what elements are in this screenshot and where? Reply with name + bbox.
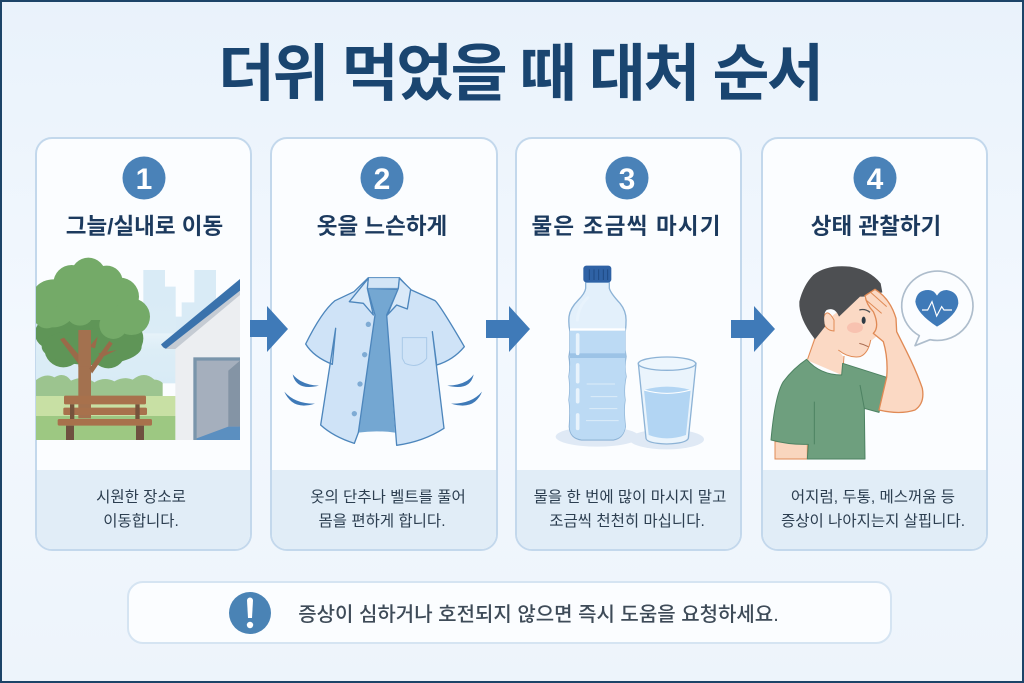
step 1 heading: 그늘/실내로 이동 — [66, 214, 223, 239]
step 2 heading: 옷을 느슨하게 — [317, 214, 447, 239]
step 3 number: 3 — [619, 163, 635, 196]
step 4 description: 증상이 나아지는지 살핍니다. — [781, 512, 965, 530]
icon: person holding forehead with heart bubble — [771, 266, 973, 459]
step 1 number — [122, 156, 166, 200]
step 3 description: 조금씩 천천히 마십니다. — [549, 512, 705, 530]
panel: step 2 — [271, 138, 497, 550]
callout — [128, 582, 891, 643]
step 4 description: 어지럼, 두통, 메스꺼움 등 — [791, 488, 955, 506]
icon: exclamation — [229, 592, 271, 634]
panel: step 1 — [29, 138, 251, 550]
step 1 number: 1 — [136, 163, 152, 196]
step 1 description: 이동합니다. — [103, 512, 179, 530]
step 4 description — [781, 488, 965, 530]
step 2 description: 옷의 단추나 벨트를 풀어 — [310, 488, 466, 506]
arrow 3 — [731, 306, 775, 352]
step 4 number — [854, 156, 896, 200]
icon: open shirt — [284, 278, 482, 445]
arrow 2 — [486, 306, 530, 352]
icon: water bottle and glass — [556, 266, 704, 449]
step 3 number — [606, 156, 648, 200]
step 1 description — [96, 488, 186, 530]
icon: tree, bench and building — [29, 258, 240, 440]
step 2 number — [360, 156, 404, 200]
step 3 description: 물을 한 번에 많이 마시지 말고 — [534, 488, 726, 506]
step 2 description: 몸을 편하게 합니다. — [318, 512, 446, 530]
step 1 description: 시원한 장소로 — [96, 488, 186, 506]
step 4 heading: 상태 관찰하기 — [811, 214, 941, 239]
panel: step 3 — [516, 138, 741, 550]
step 3 heading: 물은 조금씩 마시기 — [532, 214, 720, 239]
step 3 description — [534, 488, 726, 530]
panel: step 4 — [762, 138, 987, 550]
title: 더위 먹었을 때 대처 순서 — [218, 40, 824, 109]
step 2 description — [310, 488, 466, 530]
arrow 1 — [250, 306, 288, 352]
step 4 number: 4 — [867, 163, 884, 196]
step 2 number: 2 — [374, 163, 390, 196]
callout text: 증상이 심하거나 호전되지 않으면 즉시 도움을 요청하세요. — [298, 603, 779, 626]
